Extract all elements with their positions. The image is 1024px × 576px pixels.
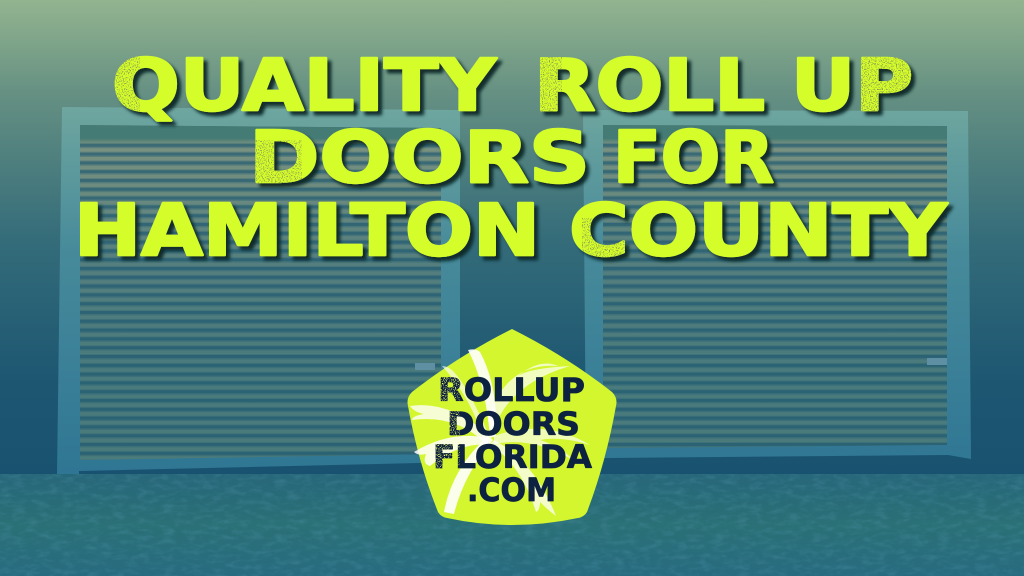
title: FOR	[613, 116, 774, 199]
door latches	[415, 358, 947, 370]
right door frame	[583, 110, 971, 459]
right roll up door	[583, 110, 971, 459]
left door frame	[57, 107, 460, 474]
right door curtain	[603, 125, 947, 448]
ground: grass	[0, 474, 1024, 576]
right door slats	[603, 125, 947, 448]
title: COUNTY	[569, 189, 949, 272]
logo wordmark	[433, 371, 592, 509]
badge pentagon	[408, 329, 616, 525]
icon: palm tree	[410, 349, 590, 516]
right door head shadow	[603, 125, 947, 143]
title: HAMILTON	[74, 189, 540, 272]
logo wordmark: FLORIDA	[433, 438, 592, 476]
title	[74, 44, 949, 272]
title: DOORS	[249, 116, 590, 199]
title: UP	[791, 44, 913, 127]
left door slats	[80, 125, 441, 460]
logo wordmark: DOORS	[447, 405, 580, 443]
title: ROLL	[534, 44, 765, 127]
left roll up door	[57, 107, 460, 474]
logo wordmark: .COM	[467, 471, 556, 509]
logo badge	[408, 329, 616, 525]
title: QUALITY	[112, 44, 498, 127]
logo wordmark: ROLLUP	[438, 371, 585, 409]
left door head shadow	[80, 125, 441, 145]
left door curtain	[80, 125, 441, 460]
